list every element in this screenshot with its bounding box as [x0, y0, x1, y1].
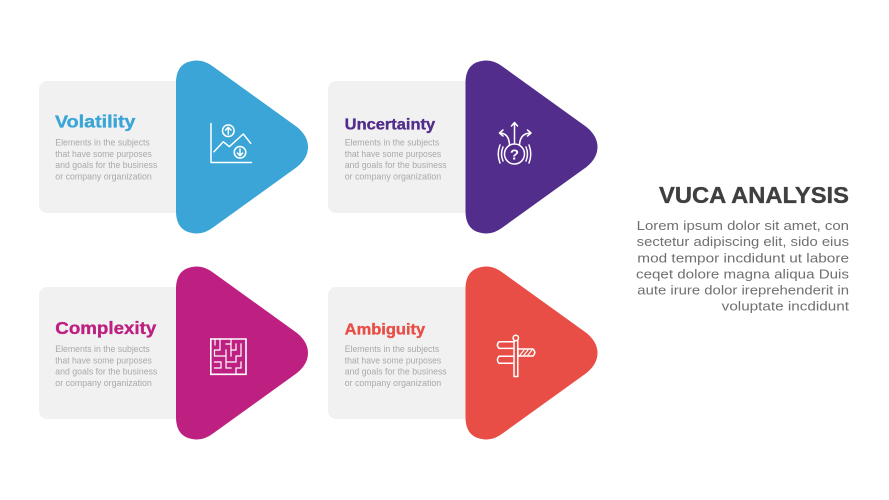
complexity description: and goals for the business: [55, 367, 158, 377]
complexity triangle: [176, 266, 308, 440]
icon: question mark with branching arrows: [498, 122, 531, 164]
complexity description: that have some purposes: [55, 355, 152, 365]
text block: lorem ipsum: sectetur adipiscing elit, sido eius: [637, 234, 850, 249]
uncertainty description: and goals for the business: [345, 160, 447, 170]
uncertainty description: that have some purposes: [345, 149, 442, 159]
ambiguity description: that have some purposes: [345, 355, 442, 365]
volatility description: and goals for the business: [55, 160, 158, 170]
text block: lorem ipsum: aute irure dolor ireprehenderit in: [637, 282, 849, 297]
volatility description: Elements in the subjects: [55, 138, 150, 148]
ambiguity description: [345, 344, 447, 388]
uncertainty triangle: [466, 60, 598, 234]
text block: lorem ipsum: voluptate incdidunt: [722, 299, 849, 314]
volatility description: that have some purposes: [55, 149, 152, 159]
text block: lorem ipsum: [636, 218, 850, 314]
uncertainty description: or company organization: [345, 171, 441, 181]
ambiguity triangle: [466, 266, 598, 440]
ambiguity heading: Ambiguity: [345, 321, 426, 338]
text block: lorem ipsum: Lorem ipsum dolor sit amet, con: [637, 218, 849, 233]
complexity description: [55, 344, 158, 388]
icon: signpost: [497, 335, 535, 376]
volatility heading: Volatility: [55, 111, 136, 131]
heading: VUCA Analysis: VUCA ANALYSIS: [659, 182, 849, 208]
panel: ambiguity: [328, 266, 598, 440]
ambiguity description: and goals for the business: [345, 367, 447, 377]
panel: uncertainty: [328, 60, 598, 234]
volatility card: [39, 81, 184, 213]
uncertainty heading: Uncertainty: [345, 116, 435, 133]
uncertainty card: [328, 81, 473, 213]
volatility description: or company organization: [55, 171, 152, 181]
text block: lorem ipsum: mod tempor incdidunt ut labore: [637, 250, 849, 265]
text block: lorem ipsum: ceqet dolore magna aliqua Duis: [636, 266, 850, 281]
uncertainty description: [345, 138, 447, 181]
complexity description: or company organization: [55, 378, 152, 388]
volatility description: [55, 138, 158, 181]
complexity card: [39, 287, 184, 419]
volatility triangle: [176, 60, 308, 234]
uncertainty description: Elements in the subjects: [345, 138, 440, 148]
ambiguity description: Elements in the subjects: [345, 344, 440, 354]
ambiguity description: or company organization: [345, 378, 441, 388]
icon: chart with up and down arrows: [211, 124, 252, 162]
icon: question mark with branching arrows: ?: [510, 146, 519, 164]
icon: maze: [211, 339, 246, 374]
complexity heading: Complexity: [55, 318, 157, 338]
ambiguity card: [328, 287, 473, 419]
panel: complexity: [39, 266, 308, 440]
complexity description: Elements in the subjects: [55, 344, 150, 354]
panel: volatility: [39, 60, 308, 234]
